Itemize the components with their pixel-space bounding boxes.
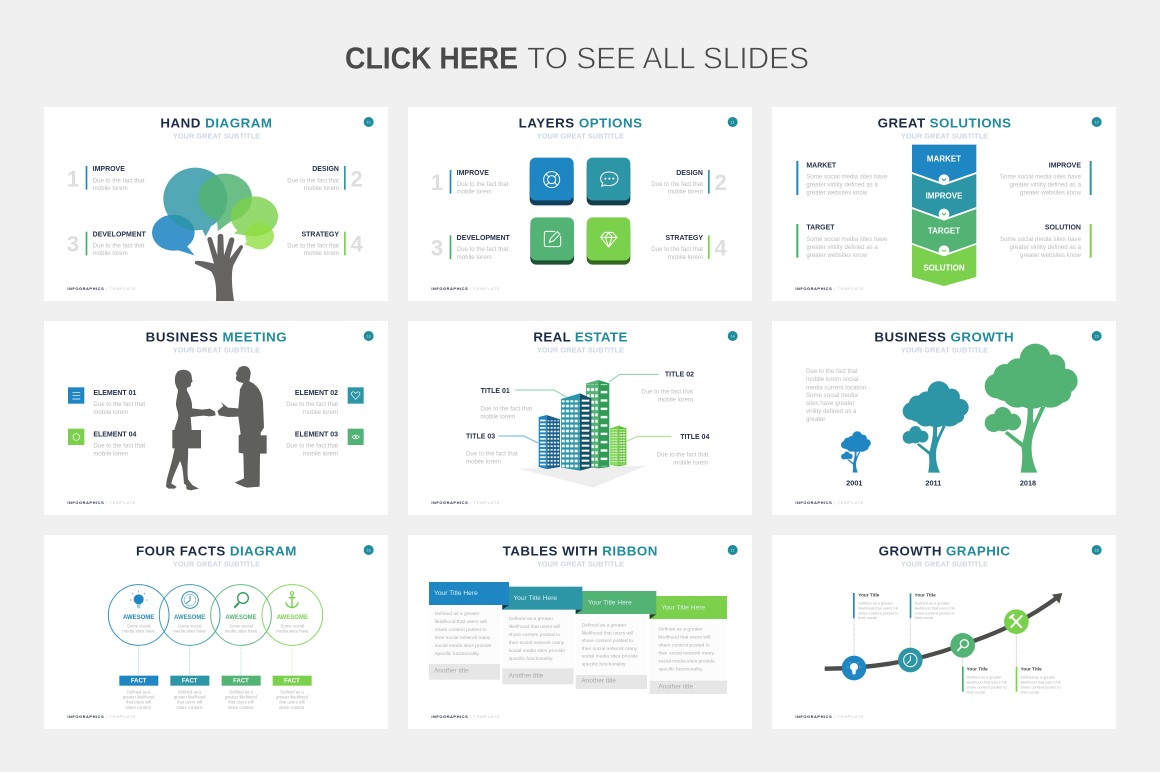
ribbon column 1 (429, 582, 509, 680)
text block 3: likelihood that users Fill (967, 681, 1007, 685)
element 02: ELEMENT 02 (295, 390, 338, 397)
title: FOUR FACTS DIAGRAM (136, 544, 296, 559)
item 4 strategy (651, 235, 728, 261)
page number: 11 (731, 120, 735, 124)
page number (364, 331, 374, 341)
callout title 01 (480, 388, 567, 420)
footer: INFOGRAPHICS | TEMPLATE (67, 286, 136, 291)
text solution: greater websites know (1020, 252, 1082, 259)
ribbon column 3: specific functionality. (582, 662, 626, 668)
text improve: IMPROVE (1049, 162, 1081, 169)
text block 1 (853, 593, 898, 620)
icon: anchor (286, 592, 298, 608)
fact descriptions: share content. (228, 705, 254, 710)
element 04: mobile lorem (93, 451, 128, 458)
fact descriptions: Defined as a (280, 690, 304, 695)
text improve: Some social media sites have (1000, 174, 1082, 181)
ribbon column 3: likelihood that users will (582, 630, 633, 636)
element 04 (68, 429, 145, 458)
title: GROWTH GRAPHIC (879, 544, 1010, 559)
circle labels (122, 615, 309, 633)
fact descriptions (123, 690, 309, 710)
ribbon column 4: their social network many (658, 650, 714, 656)
panel: tables with ribbon (408, 535, 752, 729)
text block 2: Your Title (915, 593, 936, 598)
fact descriptions: greater likelihood (174, 695, 206, 700)
element 04: ELEMENT 04 (93, 432, 137, 439)
text block 1: likelihood that users Fill (858, 606, 898, 610)
panel: layers options (408, 107, 752, 301)
footer: INFOGRAPHICS | TEMPLATE (431, 714, 500, 719)
item 1 improve: mobile lorem (93, 185, 128, 192)
callout title 02: mobile lorem (658, 397, 693, 404)
circle blue (108, 585, 169, 645)
subtitle: YOUR GREAT SUBTITLE (173, 559, 260, 568)
circle labels: AWESOME (277, 615, 308, 621)
item 1 improve: Due to the fact that (457, 181, 509, 188)
page number: 16 (367, 548, 371, 552)
footer: INFOGRAPHICS | TEMPLATE (795, 714, 864, 719)
item 1 improve: 1 (67, 166, 79, 191)
icon: light bulb (130, 591, 147, 608)
fact descriptions: that users will (126, 700, 151, 705)
callout title 03: Due to the fact that (466, 451, 518, 458)
item 1 improve: IMPROVE (457, 170, 489, 177)
fact descriptions: Defined as a (229, 690, 253, 695)
ribbon column 1: specific functionality. (435, 651, 480, 657)
year labels: 2018 (1020, 478, 1036, 487)
callout title 01: mobile lorem (480, 413, 515, 420)
panel: great solutions (772, 107, 1116, 301)
fact descriptions: share content. (125, 705, 152, 710)
item 3 development: mobile lorem (93, 250, 128, 257)
item 3 development: Due to the fact that (457, 246, 509, 253)
chevron market (912, 145, 976, 183)
building green (586, 380, 609, 468)
element 04: Due to the fact that (93, 443, 145, 450)
element 02: Due to the fact that (286, 401, 338, 408)
item 4 strategy: 4 (351, 231, 364, 256)
text market: MARKET (806, 162, 837, 169)
item 2 design: mobile lorem (304, 185, 339, 192)
fact labels: FACT (131, 679, 147, 685)
ribbon column 4: share content posted to (658, 643, 710, 649)
ribbon column 2: likelihood that users will (509, 624, 560, 630)
page number: 18 (1095, 548, 1099, 552)
text target (796, 224, 888, 259)
subtitle: YOUR GREAT SUBTITLE (537, 345, 624, 354)
item 1 improve: 1 (431, 170, 443, 195)
item 2 design (651, 170, 727, 196)
ribbon column 1: Defined as a greater (435, 611, 480, 617)
hand silhouette (195, 234, 243, 301)
text block 2: share content posted to (915, 611, 955, 615)
item 3 development (431, 235, 511, 261)
fact descriptions: greater likelihood (276, 695, 309, 700)
ribbon column 4 (650, 596, 727, 694)
item 2 design: Due to the fact that (651, 181, 703, 188)
circle lime (262, 585, 323, 645)
item 1 improve: mobile lorem (457, 189, 492, 196)
fact descriptions: Defined as a (178, 690, 202, 695)
element 01: Due to the fact that (93, 401, 145, 408)
page number: 13 (367, 334, 371, 338)
circle labels: AWESOME (174, 615, 205, 621)
element 01: ELEMENT 01 (93, 390, 137, 397)
chevron improve: IMPROVE (926, 192, 963, 201)
element 02: mobile lorem (303, 409, 338, 416)
fact labels: FACT (284, 679, 300, 685)
page number (728, 331, 738, 341)
subtitle: YOUR GREAT SUBTITLE (901, 345, 988, 354)
text improve: greater websites know (1020, 190, 1082, 197)
text block 4: share content posted to (1021, 685, 1061, 689)
item 4 strategy: mobile lorem (304, 250, 339, 257)
text block 3: share content posted to (967, 685, 1007, 689)
footer: INFOGRAPHICS | TEMPLATE (67, 714, 136, 719)
fact descriptions: greater likelihood (225, 695, 258, 700)
subtitle: YOUR GREAT SUBTITLE (173, 345, 260, 354)
page number: 17 (731, 548, 735, 552)
callout title 01: TITLE 01 (481, 388, 510, 395)
text block 2: likelihood that users Fill (915, 606, 955, 610)
growth arrow (825, 593, 1062, 669)
main heading: CLICK HERE (345, 40, 518, 76)
page number: 10 (367, 120, 371, 124)
item 3 development: Due to the fact that (93, 242, 145, 249)
icon: magnifier (234, 593, 248, 608)
ribbon column 3: Your Title Here (588, 600, 632, 607)
dotted connectors (854, 619, 1016, 667)
title: REAL ESTATE (533, 330, 627, 345)
building blue (539, 415, 560, 469)
item 1 improve: Due to the fact that (93, 177, 145, 184)
item 4 strategy: 4 (715, 235, 728, 260)
text block 2: Defined as a greater (915, 602, 950, 606)
text improve: greater virility defined as a (1009, 182, 1082, 189)
ground shadow (519, 466, 647, 488)
description: media current location (806, 384, 867, 391)
tile: chat (587, 158, 630, 205)
circle labels: media sites have (225, 628, 258, 633)
panel: real estate (408, 321, 752, 515)
main heading (345, 40, 809, 76)
description: Some social media (806, 392, 858, 399)
item 3 development: DEVELOPMENT (457, 235, 511, 242)
panel: four facts diagram (44, 535, 388, 729)
fact labels: FACT (182, 679, 198, 685)
ribbon column 2 (502, 587, 582, 684)
panel: business growth (772, 321, 1116, 515)
chevron solution: SOLUTION (923, 263, 965, 272)
text target: greater websites know (806, 252, 868, 259)
text block 4: Defined as a greater (1021, 676, 1056, 680)
building teal (561, 393, 591, 471)
item 4 strategy: STRATEGY (665, 235, 703, 242)
year labels (846, 478, 1036, 487)
building lime (610, 426, 626, 466)
item 4 strategy: Due to the fact that (651, 246, 703, 253)
subtitle: YOUR GREAT SUBTITLE (901, 131, 988, 140)
text market: greater websites know (806, 190, 868, 197)
fact descriptions: that users will (177, 700, 202, 705)
ribbon column 2: Another title (509, 673, 544, 680)
ribbon column 2: social media sites provide (509, 648, 565, 654)
chevron target: TARGET (928, 226, 960, 235)
page number (1092, 545, 1102, 555)
ribbon column 2: Defined as a greater (509, 616, 554, 622)
chevron improve (912, 174, 976, 219)
ribbon column 1: likelihood that users will (435, 619, 487, 625)
ribbon column 1: share content posted to (435, 627, 487, 633)
page number (1092, 331, 1102, 341)
text block 3: their social (967, 690, 985, 694)
fact descriptions: share content. (279, 705, 305, 710)
item 3 development: 3 (431, 235, 443, 260)
fact descriptions: that users will (279, 700, 305, 705)
title: BUSINESS MEETING (146, 330, 287, 345)
fact labels (119, 676, 312, 686)
circle teal (159, 585, 220, 645)
ribbon column 3: their social network many (582, 646, 638, 652)
ribbon column 3 (576, 591, 656, 689)
item 1 improve: IMPROVE (93, 166, 125, 173)
text block 3: Your Title (967, 667, 988, 672)
node: clock (898, 648, 923, 672)
circle labels: AWESOME (225, 615, 257, 621)
text block 1: Defined as a greater (858, 602, 894, 606)
callout title 02 (609, 371, 694, 404)
speech bubbles (152, 168, 278, 255)
text target: greater virility defined as a (806, 244, 878, 251)
ribbon column 4: Defined as a greater (658, 627, 703, 633)
ribbon column 2: share content posted to (509, 632, 560, 638)
text solution: greater virility defined as a (1009, 244, 1082, 251)
text block 3: Defined as a greater (967, 676, 1002, 680)
ribbon column 3: Another title (581, 678, 616, 685)
text market: Some social media sites have (806, 174, 888, 181)
element 03: ELEMENT 03 (295, 432, 338, 439)
circle labels: Some social (281, 623, 304, 628)
description (806, 368, 867, 423)
text solution: SOLUTION (1045, 225, 1081, 232)
text block 4 (1016, 667, 1061, 694)
man silhouette (217, 366, 267, 488)
callout title 02: Due to the fact that (641, 389, 693, 396)
ribbon column 1: Another title (434, 668, 469, 675)
item 2 design: DESIGN (312, 166, 339, 173)
ribbon column 4: specific functionality. (658, 666, 703, 672)
text solution: Some social media sites have (1000, 236, 1082, 243)
page number: 12 (1095, 120, 1099, 124)
text market: greater virility defined as a (806, 182, 878, 189)
title: LAYERS OPTIONS (519, 116, 642, 131)
item 3 development: DEVELOPMENT (93, 231, 147, 238)
callout title 03 (466, 433, 538, 466)
circle labels: AWESOME (123, 615, 154, 621)
element 01: mobile lorem (93, 409, 128, 416)
circle labels: media sites have (276, 628, 309, 633)
tile: lifebuoy (530, 158, 574, 205)
text improve (1000, 161, 1092, 197)
text block 1: their social (858, 616, 877, 620)
tile: diamond (587, 217, 630, 265)
ribbon column 4: Your Title Here (661, 604, 705, 611)
fact labels: FACT (233, 679, 249, 685)
text block 2 (910, 593, 955, 620)
ribbon column 2: their social network many (509, 640, 565, 646)
ribbon column 3: share content posted to (582, 638, 633, 644)
tree 2001 (841, 431, 871, 473)
element 01 (68, 387, 145, 416)
text block 4: their social (1021, 690, 1039, 694)
text block 4: likelihood that users Fill (1021, 681, 1061, 685)
ribbon column 4: Another title (658, 683, 693, 690)
footer: INFOGRAPHICS | TEMPLATE (431, 286, 500, 291)
fact descriptions: Defined as a (127, 690, 151, 695)
callout title 01: Due to the fact that (480, 405, 532, 412)
title: BUSINESS GROWTH (874, 330, 1014, 345)
item 4 strategy (287, 231, 364, 257)
element 03: Due to the fact that (286, 443, 338, 450)
item 2 design: 2 (351, 166, 363, 191)
chevron solution (912, 245, 976, 286)
description: greater (806, 416, 825, 423)
callout title 02: TITLE 02 (665, 371, 694, 378)
tree 2018 (985, 344, 1078, 473)
item 1 improve (431, 170, 509, 196)
ribbon column 4: social media sites provide (658, 658, 715, 664)
chevron target (912, 209, 976, 254)
subtitle: YOUR GREAT SUBTITLE (537, 131, 624, 140)
chevron connectors (939, 174, 949, 256)
ribbon column 2: Your Title Here (513, 595, 557, 602)
page number (364, 545, 374, 555)
text block 1: share content posted to (858, 611, 898, 615)
ribbon column 1: their social network many (435, 635, 491, 641)
item 4 strategy: STRATEGY (301, 231, 339, 238)
year labels: 2011 (925, 478, 941, 487)
fact descriptions: greater likelihood (123, 695, 155, 700)
node: magnifier (950, 633, 975, 658)
page number (364, 117, 374, 127)
item 3 development (67, 231, 147, 257)
description: virility defined as a (806, 408, 857, 415)
circle labels: media sites have (122, 628, 155, 633)
panel: growth graphic (772, 535, 1116, 729)
text block 4: Your Title (1021, 667, 1042, 672)
chevron market: MARKET (927, 155, 961, 164)
text target: Some social media sites have (806, 236, 888, 243)
item 2 design: DESIGN (676, 170, 703, 177)
fact descriptions: share content. (176, 705, 203, 710)
fact descriptions: that users will (228, 700, 254, 705)
ribbon column 4: likelihood that users will (658, 635, 710, 641)
footer: INFOGRAPHICS | TEMPLATE (795, 286, 864, 291)
item 3 development: 3 (67, 231, 79, 256)
text block 3 (962, 667, 1007, 694)
year labels: 2001 (846, 478, 862, 487)
circle green (211, 585, 271, 645)
item 2 design: mobile lorem (668, 189, 703, 196)
icon: clock (182, 592, 198, 608)
description: Due to the fact that (806, 368, 858, 375)
element 02 (286, 387, 364, 416)
circle labels: media sites have (173, 628, 206, 633)
page number: 15 (1095, 334, 1099, 338)
callout title 03: mobile lorem (466, 459, 501, 466)
item 3 development: mobile lorem (457, 254, 492, 261)
element 03: mobile lorem (303, 451, 338, 458)
circle labels: Some social (127, 623, 150, 628)
node: bulb (842, 656, 866, 680)
text market (796, 161, 888, 197)
callout title 04: Due to the fact that (657, 451, 709, 458)
dotted connectors (139, 647, 292, 674)
ribbon column 3: Defined as a greater (582, 622, 627, 628)
page number (728, 545, 738, 555)
subtitle: YOUR GREAT SUBTITLE (173, 131, 260, 140)
ribbon column 3: social media sites provide (582, 654, 638, 660)
callout title 04: mobile lorem (673, 459, 708, 466)
page number: 14 (731, 334, 735, 338)
description: mobile lorem social (806, 376, 858, 383)
main heading: TO SEE ALL SLIDES (527, 40, 809, 76)
node: tools (1004, 609, 1029, 634)
woman silhouette (166, 370, 216, 490)
ribbon column 2: specific functionality. (509, 656, 553, 662)
panel: business meeting (44, 321, 388, 515)
text target: TARGET (806, 225, 835, 232)
title: HAND DIAGRAM (160, 116, 272, 131)
tree 2011 (903, 381, 969, 473)
text block 2: their social (915, 616, 933, 620)
item 2 design: Due to the fact that (287, 177, 339, 184)
item 1 improve (67, 166, 145, 192)
callout title 04: TITLE 04 (680, 434, 709, 441)
callout title 03: TITLE 03 (466, 433, 495, 440)
footer: INFOGRAPHICS | TEMPLATE (67, 500, 136, 505)
item 4 strategy: mobile lorem (668, 254, 703, 261)
footer: INFOGRAPHICS | TEMPLATE (431, 500, 500, 505)
text solution (1000, 224, 1092, 259)
tile: note edit (530, 217, 574, 265)
subtitle: YOUR GREAT SUBTITLE (901, 559, 988, 568)
item 2 design (287, 166, 363, 192)
item 4 strategy: Due to the fact that (287, 242, 339, 249)
title: GREAT SOLUTIONS (878, 116, 1011, 131)
circle labels: Some social (229, 623, 253, 628)
callout title 04 (627, 434, 709, 466)
item 2 design: 2 (715, 170, 727, 195)
element 03 (286, 429, 364, 458)
footer: INFOGRAPHICS | TEMPLATE (795, 500, 864, 505)
page number (728, 117, 738, 127)
panel: hand diagram (44, 107, 388, 301)
ribbon column 1: Your Title Here (434, 590, 478, 597)
page number (1092, 117, 1102, 127)
ribbon column 1: social media sites provide (435, 643, 492, 649)
description: sites have greater (806, 400, 855, 407)
circle labels: Some social (178, 623, 201, 628)
title: TABLES WITH RIBBON (503, 544, 657, 559)
text block 1: Your Title (858, 593, 880, 598)
subtitle: YOUR GREAT SUBTITLE (537, 559, 624, 568)
